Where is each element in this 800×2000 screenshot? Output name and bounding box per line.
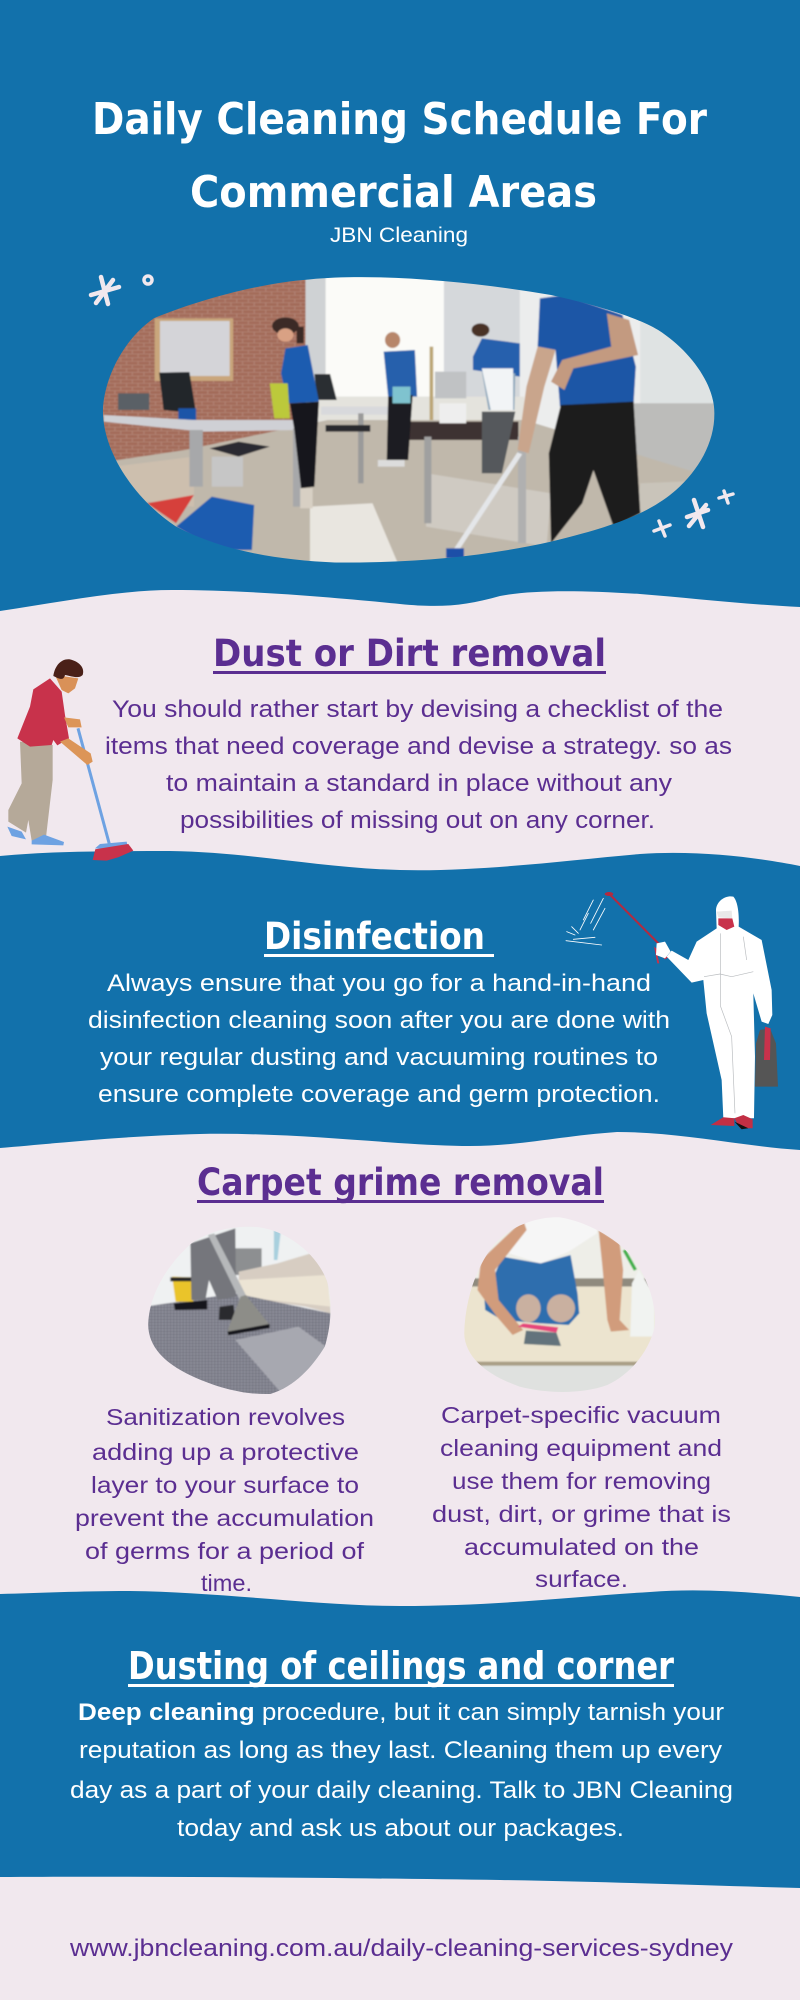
heading: carpet grime removal: Carpet grime removal xyxy=(197,1161,604,1204)
suit xyxy=(667,896,772,1118)
desks xyxy=(104,415,299,432)
title xyxy=(92,94,707,218)
man back xyxy=(472,323,489,337)
text: dust or dirt removal: possibilities of missing out on any corner. xyxy=(180,807,655,834)
image: cleaners in office xyxy=(96,270,721,567)
text: disinfection: your regular dusting and vacuuming routines to xyxy=(100,1044,658,1071)
icon: person in protective suit spraying xyxy=(566,892,778,1129)
icon: sparkles bottom right xyxy=(654,491,733,536)
subtitle: JBN Cleaning xyxy=(330,224,468,247)
chairs xyxy=(210,442,270,457)
title: Commercial Areas xyxy=(190,167,597,218)
panel: footer band xyxy=(0,1877,800,2000)
text: carpet vacuum column xyxy=(432,1402,731,1592)
text: dust or dirt removal: You should rather start by devising a checklist of the xyxy=(112,696,723,723)
text: sanitization column: prevent the accumulation xyxy=(75,1505,374,1531)
text: dusting: reputation as long as they last. Cleaning them up every xyxy=(79,1737,722,1764)
text: sanitization column: adding up a protective xyxy=(92,1439,359,1465)
panel: dust or dirt removal band xyxy=(0,590,800,870)
text: disinfection xyxy=(88,970,670,1108)
text: carpet vacuum column: dust, dirt, or grime that is xyxy=(432,1501,731,1527)
text: carpet vacuum column: use them for removing xyxy=(452,1468,711,1494)
woman left xyxy=(272,317,299,335)
text: dust or dirt removal: to maintain a standard in place without any xyxy=(166,770,672,797)
text: website url: www.jbncleaning.com.au/daily-cleaning-services-sydney xyxy=(69,1935,733,1962)
man front xyxy=(538,295,636,407)
text: dusting xyxy=(70,1699,733,1842)
text: carpet vacuum column: cleaning equipment and xyxy=(440,1435,722,1461)
image: carpet vacuuming xyxy=(144,1223,334,1397)
text: disinfection: Always ensure that you go for a hand-in-hand xyxy=(107,970,651,997)
text: disinfection: ensure complete coverage and germ protection. xyxy=(98,1081,660,1108)
text: disinfection: disinfection cleaning soon after you are done with xyxy=(88,1007,670,1034)
heading: dusting of ceilings and corner: Dusting of ceilings and corner xyxy=(128,1644,674,1688)
text: carpet vacuum column: surface. xyxy=(535,1566,628,1592)
text: carpet vacuum column: Carpet-specific vacuum xyxy=(441,1402,721,1428)
floor xyxy=(116,419,693,562)
image: brushing carpet by hand xyxy=(460,1213,660,1397)
icon: man sweeping with broom xyxy=(7,659,133,861)
boots xyxy=(711,1117,734,1126)
poster xyxy=(155,318,233,381)
icon: sparkle top left xyxy=(91,276,152,304)
text: dusting: today and ask us about our packages. xyxy=(177,1815,624,1842)
text: sanitization column: layer to your surface to xyxy=(91,1472,359,1498)
back monitor xyxy=(314,374,337,400)
heading: disinfection: Disinfection xyxy=(264,915,485,958)
text: dust or dirt removal xyxy=(105,696,732,834)
tank xyxy=(755,1028,778,1087)
text: sanitization column: of germs for a period of xyxy=(85,1538,365,1564)
heading: dust or dirt removal: Dust or Dirt removal xyxy=(213,632,606,675)
left monitor xyxy=(159,372,196,413)
text: carpet vacuum column: accumulated on the xyxy=(464,1534,699,1560)
panel: carpet grime removal band xyxy=(0,1132,800,1606)
title: Daily Cleaning Schedule For xyxy=(92,94,707,145)
text: dusting: Deep cleaning procedure, but it can simply tarnish your xyxy=(78,1699,724,1726)
cart xyxy=(147,495,194,523)
text: dust or dirt removal: items that need coverage and devise a strategy. so as xyxy=(105,733,732,760)
text: sanitization column: time. xyxy=(201,1570,252,1596)
text: sanitization column xyxy=(75,1404,374,1596)
text: dusting: day as a part of your daily cleaning. Talk to JBN Cleaning xyxy=(70,1777,733,1804)
text: sanitization column: Sanitization revolves xyxy=(106,1404,345,1430)
shelf xyxy=(430,347,433,420)
woman centre xyxy=(385,332,400,348)
